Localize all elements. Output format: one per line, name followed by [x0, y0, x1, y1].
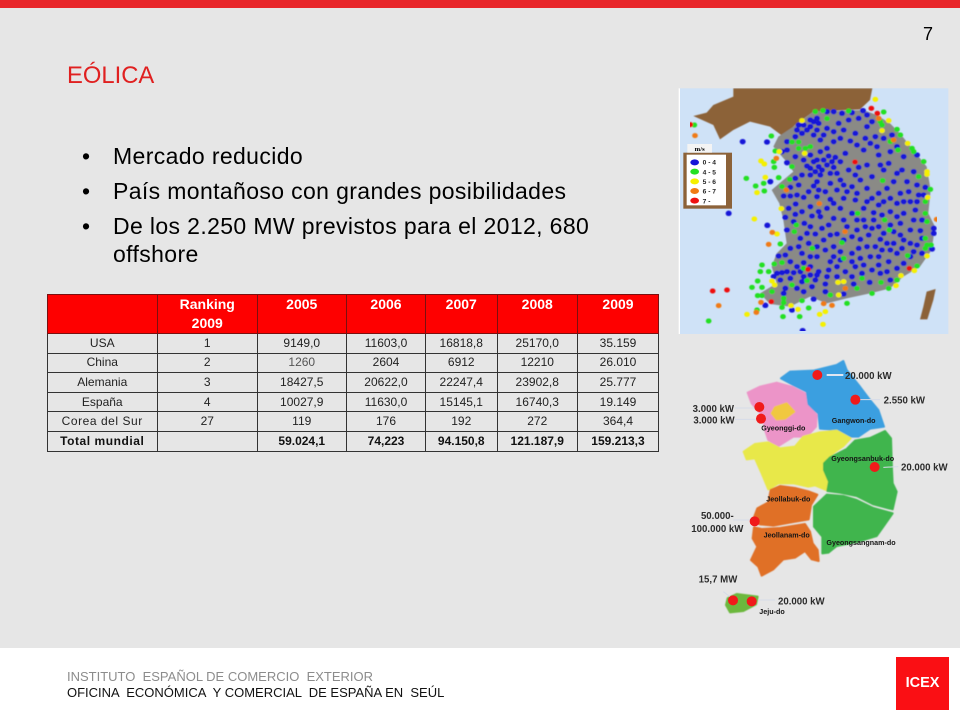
region: Seoul: [772, 403, 794, 419]
wind capacity table: 22247,4: [440, 375, 483, 389]
wind capacity table: Total mundial: [60, 434, 144, 448]
legend: 4 - 5: [703, 169, 716, 176]
wind capacity table: 25.777: [600, 375, 636, 389]
red wind dots: [690, 108, 910, 302]
region: Jeollanam-do: [751, 524, 819, 576]
blue wind dots: [728, 111, 934, 331]
project markers: [728, 370, 880, 606]
page number: 7: [923, 24, 933, 44]
wind capacity table: 27: [201, 414, 214, 428]
wind capacity table: 2008: [522, 296, 553, 312]
region names: Gyeongsanbuk-do: [831, 455, 895, 463]
wind capacity table: 11603,0: [365, 336, 407, 350]
bullet list: •: [82, 143, 90, 169]
bullet list: •: [82, 213, 90, 239]
ICEX logo: [896, 657, 949, 710]
wind capacity table: 119: [292, 414, 311, 428]
wind capacity table: 16818,8: [440, 336, 483, 350]
capacity labels: 3.000 kW: [693, 415, 736, 426]
regional wind farm map: [691, 359, 949, 616]
capacity labels: 100.000 kW: [691, 524, 744, 535]
title: EÓLICA: [67, 62, 154, 89]
wind capacity table: 6912: [448, 355, 475, 369]
wind capacity table: 9149,0: [283, 336, 320, 350]
wind capacity table: 35.159: [600, 336, 636, 350]
capacity labels: 20.000 kW: [778, 596, 826, 607]
wind capacity table: 59.024,1: [278, 434, 325, 448]
wind capacity table: Alemania: [77, 375, 127, 389]
wind capacity table: China: [87, 355, 118, 369]
legend: 7 -: [703, 198, 710, 205]
wind capacity table: USA: [90, 336, 115, 350]
legend: 0 - 4: [703, 160, 716, 167]
wind capacity table: 2005: [286, 296, 317, 312]
wind capacity table: España: [82, 395, 123, 409]
region names: Gyeongsangnam-do: [826, 539, 896, 547]
bullet list: De los 2.250 MW previstos para el 2012, 680: [113, 213, 589, 239]
green wind dots: [694, 111, 931, 321]
wind capacity table: 10027,9: [280, 395, 323, 409]
legend: m/s: [695, 146, 705, 153]
capacity labels: 15,7 MW: [699, 574, 738, 585]
capacity labels: 3.000 kW: [693, 404, 735, 415]
wind capacity table: 94.150,8: [438, 434, 485, 448]
region names: Gyeonggi-do: [761, 425, 806, 433]
wind capacity table: 23902,8: [516, 375, 559, 389]
region names: [759, 417, 896, 616]
wind capacity table: 1260: [288, 355, 315, 369]
wind speed map of Korea: [678, 88, 948, 334]
legend: [683, 144, 732, 209]
wind capacity table: 18427,5: [280, 375, 323, 389]
wind capacity table: 2009: [192, 315, 223, 331]
wind capacity table: 2006: [370, 296, 402, 312]
wind capacity table: 2007: [446, 296, 477, 312]
leader lines: [723, 375, 898, 600]
wind capacity table: 25170,0: [516, 336, 559, 350]
capacity labels: 20.000 kW: [901, 463, 949, 474]
wind capacity table: 16740,3: [516, 395, 559, 409]
wind capacity table: 4: [204, 395, 211, 409]
capacity labels: 2.550 kW: [884, 395, 926, 406]
wind capacity table: Ranking: [180, 296, 235, 312]
wind capacity table: 176: [376, 414, 396, 428]
wind capacity table: 272: [527, 414, 547, 428]
region: Jeju-do: [726, 594, 758, 612]
wind capacity table: 2009: [602, 296, 634, 312]
bullet list: offshore: [113, 241, 199, 267]
wind capacity table: 159.213,3: [591, 434, 645, 448]
wind capacity table: 192: [451, 414, 471, 428]
footer band: [0, 648, 960, 720]
capacity labels: 20.000 kW: [845, 371, 893, 382]
land mass north: [693, 88, 872, 139]
region: Gyeonggi-do: [748, 383, 817, 446]
bullet list: [82, 143, 589, 267]
wind capacity table: 364,4: [603, 414, 633, 428]
capacity labels: 50.000-: [701, 511, 734, 522]
bullet list: País montañoso con grandes posibilidades: [113, 178, 566, 204]
ICEX logo: ICEX: [906, 675, 939, 691]
wind capacity table: 2: [204, 355, 211, 369]
top red bar: [0, 0, 960, 8]
region: Gangwon-do: [781, 361, 884, 437]
wind capacity table: 19.149: [600, 395, 636, 409]
wind capacity table: 12210: [521, 355, 554, 369]
wind capacity table: 74,223: [368, 434, 404, 448]
wind capacity table: 121.187,9: [511, 434, 564, 448]
region names: Gangwon-do: [832, 417, 876, 425]
wind capacity table: 2604: [373, 355, 399, 369]
bullet list: Mercado reducido: [113, 143, 303, 169]
region names: Jeollabuk-do: [766, 495, 811, 503]
region: Gyeongsangnam-do: [814, 495, 893, 553]
legend: 5 - 6: [703, 179, 716, 186]
region names: Jeollanam-do: [764, 532, 810, 540]
wind capacity table: 3: [204, 375, 211, 389]
wind capacity table: [47, 294, 659, 452]
footer institute name: INSTITUTO ESPAÑOL DE COMERCIO EXTERIOR: [67, 669, 373, 684]
orange wind dots: [695, 118, 937, 312]
bullet list: •: [82, 178, 90, 204]
wind capacity table: Corea del Sur: [62, 414, 143, 428]
footer office name: OFICINA ECONÓMICA Y COMERCIAL DE ESPAÑA EN SEÚL: [67, 685, 444, 700]
region: Jeollabuk-do: [753, 486, 817, 526]
region: Gyeongsanbuk-do: [824, 431, 897, 509]
region names: Jeju-do: [759, 608, 785, 616]
wind capacity table: 11630,0: [365, 395, 407, 409]
capacity labels: [691, 371, 949, 607]
yellow wind dots: [747, 99, 928, 324]
land mass south: [760, 110, 935, 307]
wind capacity table: 26.010: [600, 355, 636, 369]
legend: 6 - 7: [703, 189, 716, 196]
Tsushima island: [920, 289, 936, 319]
wind capacity table: 20622,0: [364, 375, 408, 389]
region: Chungcheong: [744, 431, 851, 490]
wind capacity table: 1: [204, 336, 211, 350]
wind capacity table: 15145,1: [440, 395, 483, 409]
